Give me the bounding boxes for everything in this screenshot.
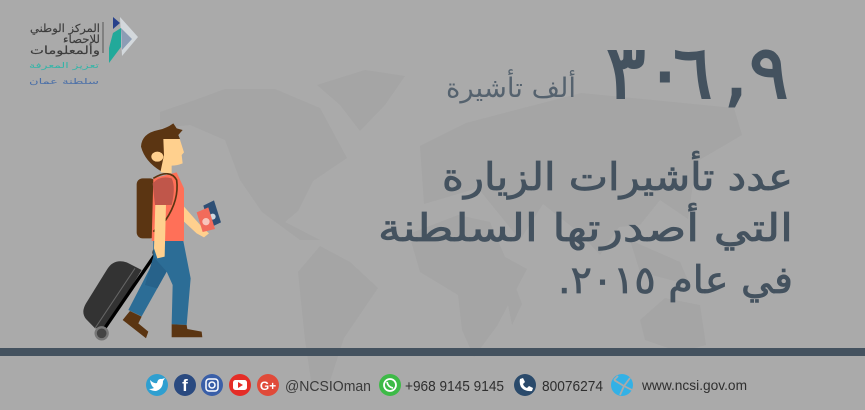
logo <box>29 17 138 86</box>
icon: youtube <box>229 374 251 396</box>
shirt <box>152 172 184 241</box>
big number: ٠ <box>645 30 685 116</box>
backpack <box>137 178 156 238</box>
divider bar <box>0 348 865 356</box>
phone number: 80076274 <box>542 378 603 395</box>
icon: facebook: f <box>182 376 188 395</box>
logo mark <box>109 17 138 63</box>
big number: ٩ <box>749 30 789 116</box>
shoes <box>172 324 202 337</box>
logo name: المركز الوطني <box>30 22 100 35</box>
passports <box>197 200 221 232</box>
icon: facebook <box>174 374 196 396</box>
icon: whatsapp <box>379 374 401 396</box>
icon: twitter <box>146 374 168 396</box>
logo name <box>30 22 100 57</box>
logo slogan: تعزيز المعرفة <box>29 61 99 70</box>
big number: ٣ <box>606 30 646 116</box>
sleeve <box>153 177 174 205</box>
head <box>141 123 184 173</box>
big number: , <box>724 30 748 116</box>
logo name: للإحصاء <box>63 33 100 46</box>
strap <box>153 174 177 232</box>
world map background <box>160 70 742 387</box>
footer contact strip <box>146 374 747 396</box>
icon: google plus: G+ <box>260 379 276 393</box>
website: www.ncsi.gov.om <box>641 377 747 393</box>
logo country: سلطنة عمان <box>29 77 99 86</box>
suitcase <box>83 248 161 339</box>
icon: phone <box>514 374 536 396</box>
main statement: في عام ٢٠١٥. <box>558 258 793 302</box>
arms <box>184 207 209 237</box>
main statement: التي أصدرتها السلطنة <box>378 203 793 251</box>
icon: google plus <box>257 374 279 396</box>
traveller illustration <box>83 123 221 339</box>
big number: ٦ <box>673 30 713 116</box>
logo name: والمعلومات <box>30 44 100 57</box>
trousers <box>128 241 191 325</box>
icon: globe <box>611 374 633 396</box>
whatsapp number: +968 9145 9145 <box>405 378 504 395</box>
main statement <box>378 151 793 302</box>
main statement: عدد تأشيرات الزيارة <box>442 151 793 200</box>
icon: instagram <box>201 374 223 396</box>
social handle: @NCSIOman <box>285 378 371 395</box>
unit label: ألف تأشيرة <box>446 68 576 104</box>
